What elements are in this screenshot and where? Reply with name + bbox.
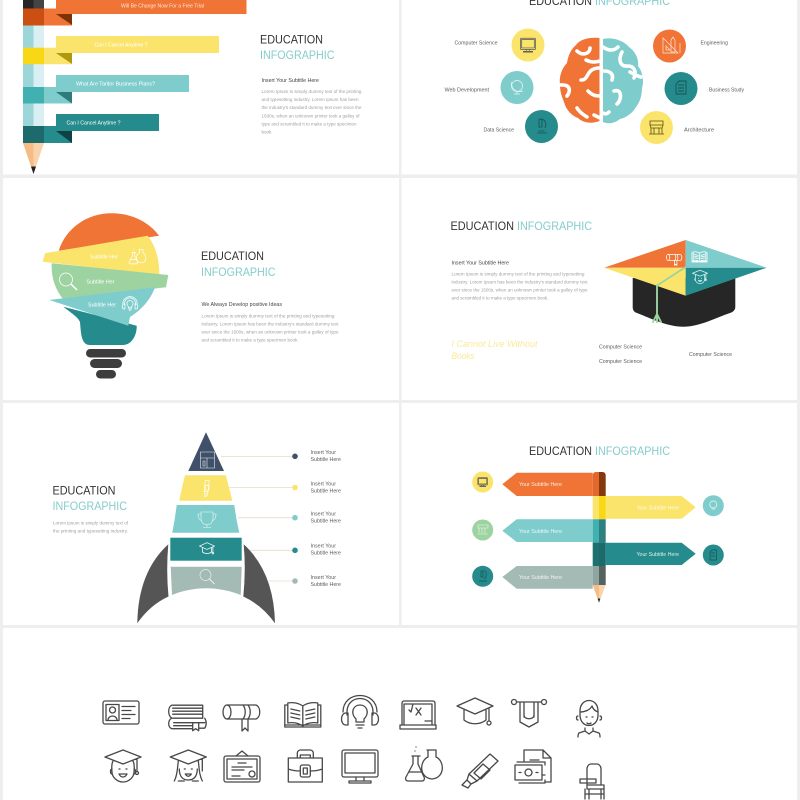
text block: the industry's standard dummy text ever since the (262, 105, 362, 110)
node: engineering: Engineering (700, 40, 728, 46)
text block: Lorem Ipsum is simply dummy text of the printing and typesetting (202, 314, 335, 318)
heading: INFOGRAPHIC (595, 444, 670, 458)
rocket tier 2 (179, 475, 232, 501)
heading (450, 219, 592, 233)
node: business study: Business Study (709, 88, 744, 94)
text block (262, 78, 362, 134)
bulb segment: teal: Subtitle Her (88, 302, 116, 308)
arrow: grey: Your Subtitle Here (519, 575, 562, 581)
callout 1: Insert Your (310, 450, 336, 456)
bulb neck (63, 307, 137, 345)
arrow: teal: Your Subtitle Here (519, 529, 562, 535)
heading: INFOGRAPHIC (260, 48, 335, 62)
icon: graduate boy (105, 750, 141, 782)
text block: ever since the 1500s, when an unknown printer took a galley of type (452, 288, 588, 292)
panel: light bulb (3, 178, 399, 400)
icon circle: bulb (703, 495, 724, 516)
icon: monitor (342, 750, 378, 783)
text block: and typesetting industry. Lorem Ipsum has been (262, 97, 359, 102)
icon: open book (285, 703, 321, 727)
vertical pencil (593, 472, 606, 603)
bulb segment: yellow: Subtitle Her (90, 254, 118, 260)
callout 3 (292, 512, 341, 524)
icon: diploma (666, 255, 682, 265)
brain illustration (560, 38, 643, 123)
tassel (653, 268, 685, 322)
ribbon: free trial (23, 0, 246, 26)
arrow: yellow (606, 496, 696, 519)
rocket fins (137, 544, 275, 623)
node: architecture (640, 111, 714, 144)
icon grid (103, 696, 604, 799)
icon: scroll (223, 705, 260, 731)
icon: marker (462, 754, 498, 788)
text block: and scrambled it to make a type specimen book. (452, 296, 548, 300)
icon: graduate girl (170, 750, 206, 781)
text block (53, 520, 129, 534)
node: architecture: Architecture (684, 128, 714, 134)
text block: Insert Your Subtitle Here (452, 260, 509, 266)
text block: Lorem Ipsum is simply dummy text of the printing and typesetting (452, 272, 585, 276)
ribbon: free trial: Will Be Change Now For a Free Trial (121, 4, 204, 10)
callout 5 (292, 575, 341, 588)
rocket tier 1 (188, 432, 224, 471)
icon: certificate (224, 751, 260, 782)
icon: money (515, 750, 551, 783)
heading (529, 0, 670, 8)
icon: banner (512, 700, 546, 727)
bulb base (86, 349, 126, 378)
icon: book (692, 252, 707, 262)
text block: 1500s, when an unknown printer took a galley of (262, 114, 360, 118)
text block: industry. Lorem Ipsum has been the industry's standard dummy text (452, 280, 588, 284)
icon: id card (103, 701, 139, 724)
bulb segment: teal (49, 287, 155, 326)
arrow: orange (502, 473, 593, 496)
callout 4: Insert Your (310, 544, 336, 550)
ribbon: cancel dark (23, 114, 159, 143)
text block: Lorem Ipsum is simply dummy text of the printing (262, 89, 362, 94)
arrow: yellow: Your Subtitle Here (636, 506, 679, 512)
callout 5: Insert Your (310, 575, 336, 581)
connector lines (221, 456, 295, 581)
heading: EDUCATION (260, 32, 323, 46)
node: computer science (454, 28, 544, 62)
text block: book. (262, 130, 272, 134)
icon circle: monitor (472, 472, 493, 492)
ribbon: cancel dark: Can I Cancel Anytime ? (66, 120, 121, 126)
heading: INFOGRAPHIC (52, 499, 127, 513)
bulb segment: green: Subtitle Her (86, 280, 115, 286)
heading (201, 249, 276, 279)
icon: books (169, 705, 206, 731)
callout 4: Subtitle Here (310, 550, 341, 556)
node: web development (444, 71, 534, 104)
arrow: grey (502, 566, 593, 589)
node: engineering (653, 30, 728, 62)
icon: chair (580, 764, 604, 799)
text block: type and scrambled it to make a type specimen (262, 122, 357, 126)
icon: headphones (342, 696, 378, 728)
text block (452, 260, 588, 300)
node: business study (664, 72, 744, 105)
rocket tier 4 (170, 538, 242, 561)
heading (529, 444, 670, 458)
panel: pencil arrows (402, 403, 797, 625)
bulb segment: yellow (43, 236, 159, 275)
text block (202, 302, 339, 342)
text block: the printing and typesetting industry. (53, 528, 128, 534)
icon: graduation cap (457, 698, 493, 725)
ribbon: cancel (23, 36, 219, 64)
node: data science: Data Science (484, 128, 514, 134)
heading: EDUCATION (201, 249, 264, 263)
arrow: orange: Your Subtitle Here (519, 482, 562, 488)
callout 2: Insert Your (310, 482, 336, 488)
callout 1: Subtitle Here (310, 457, 341, 463)
bulb segment: orange (59, 213, 159, 251)
heading: EDUCATION (529, 444, 592, 458)
panel: icon set (3, 628, 797, 800)
arrow: dark teal: Your Subtitle Here (636, 552, 679, 558)
quote: I Cannot Live Without (452, 339, 538, 349)
icon: flasks (406, 747, 442, 781)
label: computer science 1: Computer Science (599, 344, 642, 350)
panel: graduation cap (402, 178, 797, 400)
rocket tier 3 (172, 505, 239, 533)
quote (452, 339, 538, 361)
node: data science (484, 110, 558, 143)
heading: EDUCATION (450, 219, 514, 233)
pencil chart (23, 0, 246, 174)
bulb segment: green (52, 263, 168, 299)
icon: student (576, 700, 602, 737)
icon: student (692, 270, 708, 284)
text block: Lorem Ipsum is simply dummy text of (53, 520, 129, 526)
arrow: teal (502, 519, 593, 542)
pencil tip (23, 143, 44, 174)
rocket illustration (137, 432, 275, 623)
bulb illustration (43, 213, 168, 378)
node: computer science: Computer Science (454, 40, 498, 46)
text block: Insert Your Subtitle Here (262, 78, 319, 84)
panel: brain (402, 0, 797, 174)
callout 5: Subtitle Here (310, 582, 341, 588)
arrow: dark teal (606, 543, 696, 565)
cap illustration (604, 240, 767, 327)
quote: Books (452, 351, 475, 361)
callout 2 (292, 482, 341, 494)
heading: EDUCATION (52, 484, 116, 498)
heading: INFOGRAPHIC (201, 265, 276, 279)
text block: and scrambled it to make a type specimen book. (202, 338, 298, 342)
text block: ever since the 1500s, when an unknown printer took a galley of type (202, 330, 339, 334)
label: computer science 3: Computer Science (689, 352, 732, 358)
icon: briefcase (288, 750, 322, 782)
heading (52, 484, 127, 513)
cap board (604, 240, 767, 296)
heading: INFOGRAPHIC (517, 219, 592, 233)
node: web development: Web Development (444, 88, 490, 94)
callout 3: Insert Your (310, 512, 336, 518)
callout 4 (292, 544, 341, 556)
rocket tier 5 (171, 567, 242, 595)
icon circle: architecture (472, 520, 493, 540)
icon circle: microscope (472, 566, 493, 587)
text block: We Always Develop positive Ideas (202, 302, 282, 308)
label: computer science 2: Computer Science (599, 359, 642, 365)
panel: rocket (3, 403, 399, 625)
ribbon: business plans: What Are Taritor Business Plans? (76, 82, 155, 88)
heading (260, 32, 335, 62)
icon: chalkboard (400, 701, 436, 729)
panel: pencil ribbons (3, 0, 399, 174)
callout 1 (292, 450, 341, 463)
ribbon: cancel: Can I Cancel Anytime ? (94, 42, 148, 48)
text block: industry. Lorem Ipsum has been the industry's standard dummy text (202, 322, 339, 326)
ribbon: business plans (23, 75, 189, 104)
callout 3: Subtitle Here (310, 518, 341, 524)
cap base (633, 278, 735, 327)
callout 2: Subtitle Here (310, 488, 341, 494)
icon circle: document (703, 544, 724, 566)
